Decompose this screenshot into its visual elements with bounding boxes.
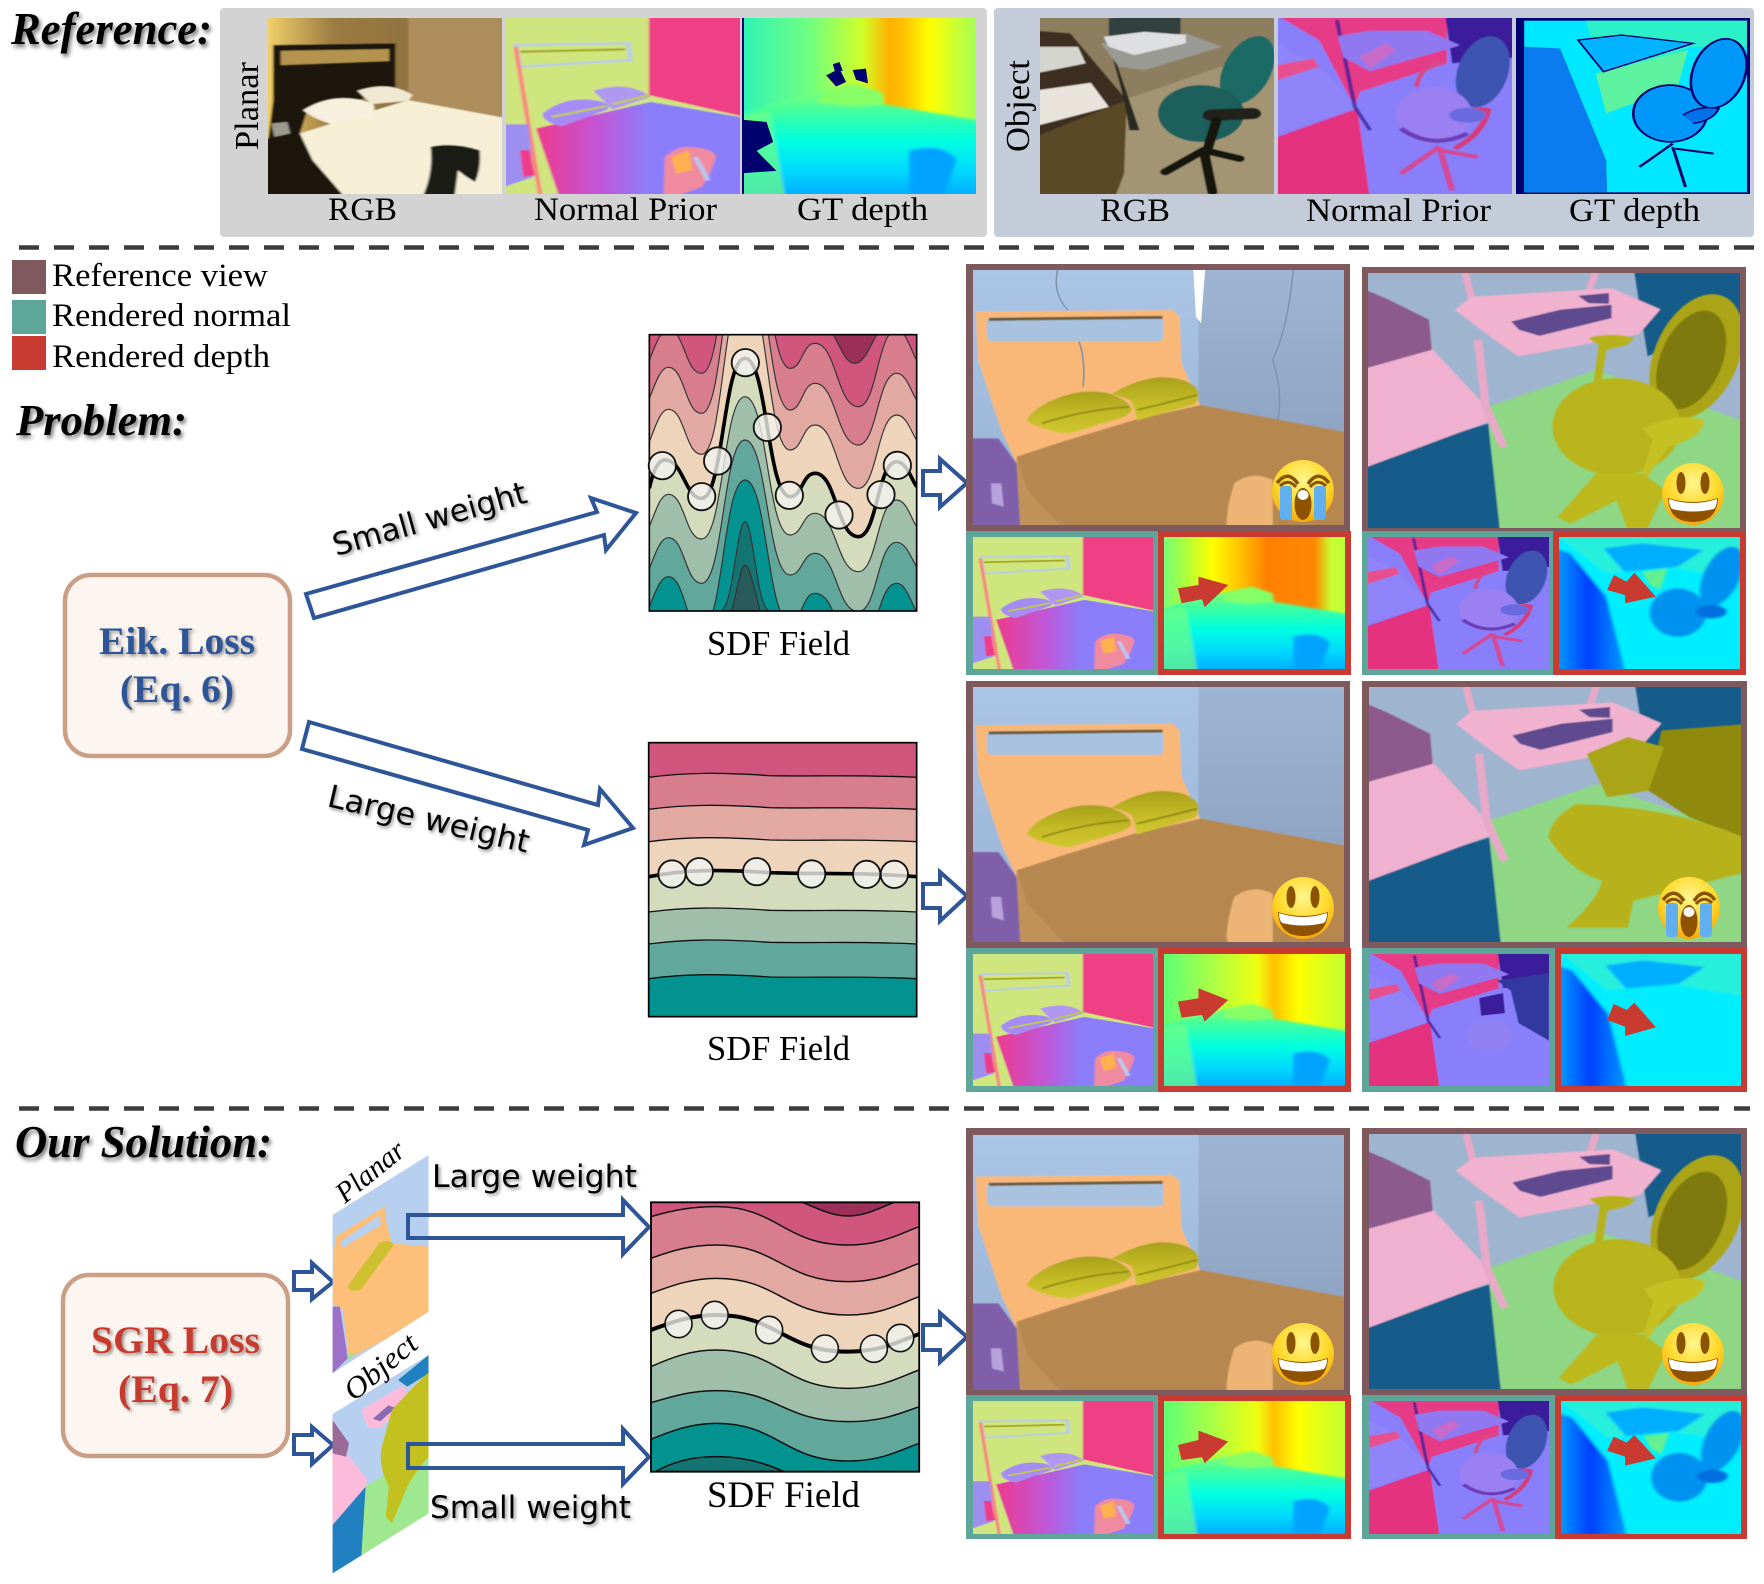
label: large weight: Large weight xyxy=(432,1159,637,1195)
label: small weight: Small weight xyxy=(328,475,531,564)
label: Object: Object xyxy=(337,1326,425,1407)
arrow: red, chair depth row 3 xyxy=(1607,1435,1656,1466)
label: Planar: Planar xyxy=(229,61,266,150)
label: small weight: Small weight xyxy=(430,1490,631,1526)
frame: bed normal, row 1 xyxy=(962,531,1168,676)
label: large weight: Large weight xyxy=(324,779,533,860)
caption: GT depth: GT depth xyxy=(1569,193,1701,229)
caption: GT depth: GT depth xyxy=(797,192,929,228)
chart: SDF field SGR loss xyxy=(651,1202,919,1483)
box: SGR Loss xyxy=(63,1275,288,1456)
caption: Normal Prior: Normal Prior xyxy=(534,192,717,228)
arrow: small weight xyxy=(408,1429,649,1484)
arrow: to planar segmentation xyxy=(294,1263,333,1299)
arrow: large weight xyxy=(302,722,633,845)
image: planar GT depth xyxy=(742,18,976,194)
image: planar normal prior xyxy=(506,18,740,194)
legend label: reference view: Reference view xyxy=(52,258,268,294)
heading: Problem: Problem: xyxy=(15,396,187,445)
heading: Reference: Reference: xyxy=(10,3,212,54)
emoji: smile, chair row 1 xyxy=(1662,463,1724,525)
legend label: rendered normal: Rendered normal xyxy=(52,298,291,334)
frame: bed normal, row 2 xyxy=(962,948,1168,1093)
frame: bed depth, row 3 xyxy=(1155,1394,1360,1545)
frame: chair normal, row 2 xyxy=(1361,948,1558,1092)
frame: chair depth, row 2 xyxy=(1552,947,1756,1094)
box: Eik. Loss: (Eq. 6) xyxy=(120,668,234,711)
frame: chair reference view, row 1 xyxy=(1350,260,1761,540)
emoji: smile, chair row 3 xyxy=(1662,1323,1724,1385)
arrow: large weight xyxy=(408,1200,649,1254)
frame: chair depth, row 3 xyxy=(1552,1394,1756,1542)
frame: chair normal, row 3 xyxy=(1361,1395,1558,1539)
legend swatch: reference view xyxy=(12,260,46,294)
panel: object reference xyxy=(994,8,1754,237)
box: SGR Loss: SGR Loss xyxy=(91,1319,260,1362)
caption: RGB: RGB xyxy=(328,192,397,228)
arrow: to results row 2 xyxy=(923,872,967,921)
legend swatch: rendered depth xyxy=(12,336,46,370)
frame: bed reference view, row 3 xyxy=(940,1118,1370,1418)
emoji: smile, bed row 2 xyxy=(1272,877,1334,939)
arrow: red, chair depth row 2 xyxy=(1607,1003,1656,1036)
box: SGR Loss: (Eq. 7) xyxy=(118,1368,233,1411)
caption: SDF Field: SDF Field xyxy=(707,1030,850,1068)
arrow: red, chair depth row 1 xyxy=(1607,573,1656,603)
caption: Normal Prior: Normal Prior xyxy=(1306,193,1491,229)
arrow: to results row 1 xyxy=(923,459,967,507)
image: object RGB xyxy=(1040,18,1274,194)
caption: SDF Field: SDF Field xyxy=(707,625,850,663)
emoji: crying, bed row 1 xyxy=(1272,460,1334,522)
results row 2 xyxy=(940,667,1762,1097)
arrow: to results row 3 xyxy=(923,1313,967,1362)
frame: bed reference view, row 1 xyxy=(940,253,1370,553)
arrow: small weight xyxy=(306,498,636,618)
arrow: red, bed depth row 2 xyxy=(1178,988,1228,1022)
arrow: red, bed depth row 3 xyxy=(1178,1431,1228,1463)
frame: bed depth, row 2 xyxy=(1155,947,1360,1097)
frame: bed reference view, row 2 xyxy=(940,667,1370,967)
panel: planar reference xyxy=(220,8,995,237)
chart: SDF field large weight xyxy=(649,743,917,1017)
legend label: rendered depth: Rendered depth xyxy=(52,339,271,375)
image: object GT depth xyxy=(1516,18,1750,194)
results row 1 xyxy=(940,253,1761,680)
label: Planar: Planar xyxy=(328,1134,412,1210)
label: Object: Object xyxy=(1000,59,1037,152)
frame: bed normal, row 3 xyxy=(962,1395,1168,1541)
legend swatch: rendered normal xyxy=(12,300,46,334)
emoji: crying, chair row 2 xyxy=(1658,877,1720,939)
arrow: red, bed depth row 1 xyxy=(1178,577,1228,607)
frame: chair reference view, row 2 xyxy=(1351,674,1762,954)
arrow: to object segmentation xyxy=(294,1427,333,1464)
results row 3 xyxy=(940,1118,1762,1545)
heading: Our Solution: Our Solution: xyxy=(15,1116,272,1167)
image: planar RGB xyxy=(268,18,502,194)
segmentation plane: object xyxy=(333,1355,429,1573)
box: Eik. Loss xyxy=(65,575,290,756)
frame: chair normal, row 1 xyxy=(1360,531,1558,675)
chart: SDF field small weight xyxy=(648,334,918,612)
legend xyxy=(12,258,291,375)
frame: chair depth, row 1 xyxy=(1550,530,1755,677)
frame: chair reference view, row 3 xyxy=(1351,1121,1762,1401)
frame: bed depth, row 1 xyxy=(1155,530,1360,680)
image: object normal prior xyxy=(1278,18,1512,194)
emoji: smile, bed row 3 xyxy=(1272,1323,1334,1385)
caption: SDF Field: SDF Field xyxy=(707,1475,860,1516)
segmentation plane: planar xyxy=(333,1155,429,1373)
box: Eik. Loss: Eik. Loss xyxy=(99,620,255,663)
caption: RGB: RGB xyxy=(1100,193,1170,229)
